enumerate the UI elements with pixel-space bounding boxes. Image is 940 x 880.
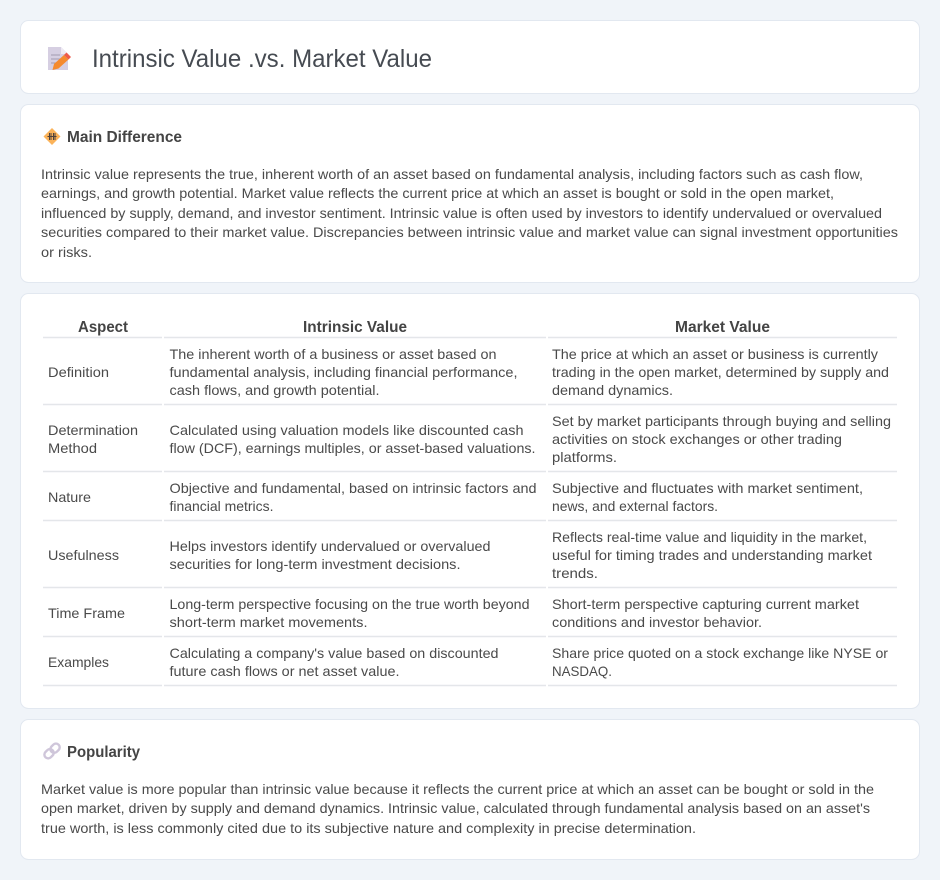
row: usefulness: Usefulness <box>48 547 119 563</box>
table header: Market Value <box>675 319 770 336</box>
text block: popularity paragraph: true worth, is less commonly cited due to its subjective nature and complexity in precise determination. <box>41 820 696 836</box>
row: determination method: Method <box>48 440 97 456</box>
row: examples: Share price quoted on a stock exchange like NYSE or <box>552 645 888 661</box>
row: usefulness <box>48 529 872 581</box>
row: examples: Examples <box>48 654 109 670</box>
row: usefulness: Reflects real-time value and liquidity in the market, <box>552 529 867 545</box>
icon: warning diamond <box>44 128 60 145</box>
row: usefulness: securities for long-term investment decisions. <box>170 556 460 572</box>
table header: Aspect <box>78 319 129 336</box>
row: definition: cash flows, and growth potential. <box>170 382 380 398</box>
row: nature: financial metrics. <box>170 498 274 514</box>
text block: main difference paragraph: influenced by supply, demand, and investor sentiment. Intrinsic value is often used by investors to identify undervalued or overvalued <box>41 205 882 221</box>
row: determination method: platforms. <box>552 449 617 465</box>
row: nature: news, and external factors. <box>552 498 718 514</box>
panel: main difference <box>20 104 920 282</box>
text block: popularity paragraph: open market, driven by supply and demand dynamics. Intrinsic value, calculated through fundamental analysis based on an asset's <box>41 800 870 816</box>
row: definition: Definition <box>48 364 109 380</box>
row: definition <box>48 346 889 398</box>
row: time frame <box>48 596 859 630</box>
row: examples <box>48 645 888 679</box>
row: definition: trading in the open market, determined by supply and <box>552 364 889 380</box>
table header: Intrinsic Value <box>303 319 407 336</box>
row: determination method: Calculated using valuation models like discounted cash <box>170 422 524 438</box>
text block: main difference paragraph: Intrinsic value represents the true, inherent worth of an asset based on fundamental analysis, including factors such as cash flow, <box>41 166 863 182</box>
row: time frame: conditions and investor behavior. <box>552 614 762 630</box>
row: examples: Calculating a company's value based on discounted <box>170 645 498 661</box>
heading: main difference: Main Difference <box>67 129 182 146</box>
row: usefulness: Helps investors identify undervalued or overvalued <box>170 538 490 554</box>
row: time frame: Time Frame <box>48 605 125 621</box>
row: determination method: Determination <box>48 422 138 438</box>
row: time frame: Long-term perspective focusing on the true worth beyond <box>170 596 530 612</box>
row: time frame: Short-term perspective capturing current market <box>552 596 859 612</box>
row: definition: The price at which an asset or business is currently <box>552 346 878 362</box>
title: Intrinsic Value .vs. Market Value <box>92 45 432 73</box>
row: nature: Nature <box>48 489 91 505</box>
icon: chain link <box>43 742 61 760</box>
row: nature: Objective and fundamental, based on intrinsic factors and <box>170 480 536 496</box>
row: nature: Subjective and fluctuates with market sentiment, <box>552 480 863 496</box>
text block: main difference paragraph: securities compared to their market value. Discrepancies between intrinsic value and market value can signal investment opportunities <box>41 224 898 240</box>
row: determination method: Set by market participants through buying and selling <box>552 413 891 429</box>
panel: header <box>20 20 920 94</box>
table header <box>78 319 770 336</box>
text block: main difference paragraph: earnings, and growth potential. Market value reflects the current price at which an asset is bought or sold in the open market, <box>41 185 834 201</box>
row: determination method: activities on stock exchanges or other trading <box>552 431 842 447</box>
row: determination method <box>48 413 891 465</box>
row: definition: demand dynamics. <box>552 382 673 398</box>
panel: popularity <box>20 720 920 860</box>
text block: popularity paragraph <box>41 781 874 836</box>
panel: comparison table <box>20 294 920 708</box>
text block: main difference paragraph <box>41 166 898 260</box>
row: determination method: flow (DCF), earnings multiples, or asset-based valuations. <box>170 440 536 456</box>
icon: document with pencil <box>48 47 71 70</box>
heading: popularity: Popularity <box>67 744 140 761</box>
row: definition: fundamental analysis, including financial performance, <box>170 364 518 380</box>
row: examples: future cash flows or net asset value. <box>170 663 400 679</box>
row: usefulness: trends. <box>552 565 598 581</box>
row: definition: The inherent worth of a business or asset based on <box>170 346 496 362</box>
row: examples: NASDAQ. <box>552 663 612 679</box>
row: time frame: short-term market movements. <box>170 614 368 630</box>
row: usefulness: useful for timing trades and understanding market <box>552 547 872 563</box>
text block: main difference paragraph: or risks. <box>41 244 92 260</box>
row: nature <box>48 480 863 514</box>
text block: popularity paragraph: Market value is more popular than intrinsic value because it reflects the current price at which an asset can be bought or sold in the <box>41 781 874 797</box>
